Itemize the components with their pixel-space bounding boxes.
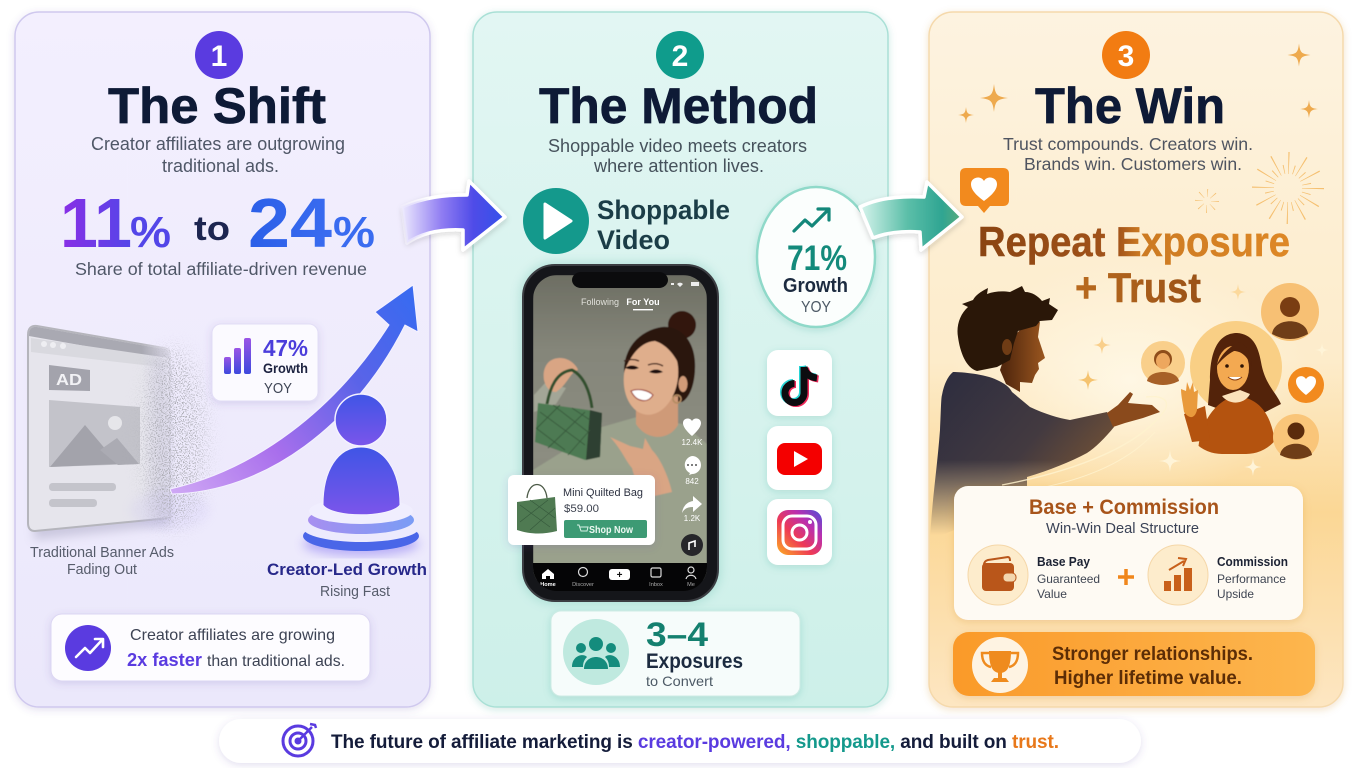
swirl of connection xyxy=(1002,397,1166,488)
top tabs: For You xyxy=(626,297,660,307)
step number 1 badge xyxy=(195,31,243,79)
growth stat card: 47% xyxy=(263,335,308,361)
label: creator-led growth xyxy=(267,560,427,600)
heading: the method: The Method xyxy=(539,78,818,134)
headline: repeat exposure + trust xyxy=(978,218,1290,311)
commission text: Commission xyxy=(1217,555,1288,569)
commission text: Performance xyxy=(1217,572,1286,586)
callout: 2x faster: than traditional ads. xyxy=(207,653,345,670)
bottom nav xyxy=(533,563,707,593)
heading: the win: The Win xyxy=(1035,78,1225,134)
exposures card: Exposures xyxy=(646,650,743,673)
step number 1 badge: 1 xyxy=(211,40,227,73)
stat: 11% to 24%: 11 xyxy=(60,184,132,262)
panel background xyxy=(473,12,888,707)
bag xyxy=(534,402,590,460)
panel: the shift xyxy=(15,12,430,707)
illustration: customer waving xyxy=(1181,321,1282,455)
eyes xyxy=(625,366,663,374)
banner: lifetime value: Stronger relationships. xyxy=(1052,644,1253,665)
growth stat card: YOY xyxy=(264,380,292,397)
stat: 11% to 24%: 24 xyxy=(248,184,332,262)
icon: heart speech bubble xyxy=(960,168,1009,213)
step number 3 badge: 3 xyxy=(1118,40,1134,73)
action icons: 842 xyxy=(685,477,699,486)
icon: commission chart xyxy=(1148,545,1208,605)
icon: trophy xyxy=(982,651,1018,682)
growth bubble: Growth xyxy=(783,275,848,297)
growth stat card: Growth xyxy=(263,360,308,376)
base pay text: Base Pay xyxy=(1037,555,1090,569)
decorative sparkles xyxy=(958,44,1318,300)
panel background xyxy=(15,12,430,707)
subtitle: where attention lives. xyxy=(593,156,764,176)
subtitle: Shoppable video meets creators xyxy=(548,136,807,156)
subtitle: Brands win. Customers win. xyxy=(1024,154,1242,174)
stat caption: Share of total affiliate-driven revenue xyxy=(75,259,367,279)
base pay text xyxy=(1037,555,1100,601)
growth bubble: 71% xyxy=(787,239,847,278)
subtitle: Creator affiliates are outgrowing xyxy=(91,133,345,154)
small sparkles xyxy=(1078,336,1329,476)
plus sign xyxy=(1118,569,1134,585)
callout: 2x faster: 2x faster xyxy=(127,650,202,670)
panel: the method xyxy=(473,12,888,707)
banner ad text inside: AD xyxy=(56,372,82,389)
subtitle xyxy=(91,133,345,176)
smile xyxy=(631,390,653,401)
bottom nav: Inbox xyxy=(649,582,663,588)
growth stat card xyxy=(212,324,318,401)
left wrist and hand xyxy=(534,382,566,412)
shoppable video logo: Video xyxy=(597,225,670,255)
headline: repeat exposure + trust: + Trust xyxy=(1075,264,1201,311)
arrow: rising creator growth xyxy=(170,285,418,494)
product card xyxy=(508,475,655,545)
label: banner ads xyxy=(30,545,174,578)
action icons: 1.2K xyxy=(684,514,701,523)
stat: 11% to 24%: % xyxy=(130,208,171,257)
ear xyxy=(678,376,688,392)
label: creator-led growth: Rising Fast xyxy=(320,584,390,600)
exposures card xyxy=(551,611,800,696)
step number 2 badge xyxy=(656,31,704,79)
community avatars xyxy=(1141,283,1319,460)
bottom nav: Discover xyxy=(572,582,594,588)
icon: youtube xyxy=(767,426,832,490)
earring xyxy=(673,395,681,403)
callout: 2x faster: Creator affiliates are growing xyxy=(130,627,335,644)
music disc xyxy=(681,534,703,556)
step number 2 badge: 2 xyxy=(672,40,688,73)
bun and hair xyxy=(668,311,696,339)
pointing hand xyxy=(610,437,672,497)
fireworks xyxy=(1199,163,1313,213)
shoppable video logo: Shoppable xyxy=(597,195,730,225)
neck xyxy=(636,396,678,437)
exposures card: to Convert xyxy=(646,673,713,689)
shoppable video logo xyxy=(523,188,730,255)
panel background xyxy=(929,12,1343,707)
closing statement: The future of affiliate marketing is creator-powered, shoppable, and built on trust. xyxy=(331,732,1059,753)
action icons: 12.4K xyxy=(682,438,703,447)
panel: the win xyxy=(929,12,1343,707)
creator figure on podium xyxy=(303,394,419,556)
icon: tiktok xyxy=(767,350,832,416)
heading: the shift: The Shift xyxy=(108,78,326,134)
bottom nav: Home xyxy=(540,582,556,588)
product card: Shop Now xyxy=(589,525,633,536)
product card: Mini Quilted Bag xyxy=(563,487,643,499)
deal card: base + commission: Win-Win Deal Structure xyxy=(1046,521,1199,537)
icon: heart circle xyxy=(1288,367,1324,403)
subtitle: traditional ads. xyxy=(162,155,279,176)
label: banner ads: Fading Out xyxy=(67,562,137,578)
sweater xyxy=(533,417,707,580)
label: creator-led growth: Creator-Led Growth xyxy=(267,560,427,579)
banner: lifetime value xyxy=(953,632,1315,696)
face xyxy=(623,340,680,415)
footer banner xyxy=(219,719,1141,763)
warm glow xyxy=(950,260,1310,500)
growth bubble: YOY xyxy=(801,299,831,316)
base pay text: Value xyxy=(1037,587,1067,601)
banner: lifetime value: Higher lifetime value. xyxy=(1054,668,1242,689)
top tabs: Following xyxy=(581,297,619,307)
arrow: method to win xyxy=(860,182,962,250)
icon: instagram xyxy=(767,499,832,565)
commission text xyxy=(1217,555,1288,601)
lavender dust glow xyxy=(130,490,210,530)
subtitle: Trust compounds. Creators win. xyxy=(1003,134,1253,154)
video photo xyxy=(533,275,707,580)
action icons xyxy=(682,419,703,523)
phone mockup xyxy=(520,262,721,604)
exposures card: 3–4 xyxy=(646,616,708,654)
bag handle xyxy=(547,370,592,408)
headline: repeat exposure + trust: Repeat Exposure xyxy=(978,218,1290,265)
deal card: base + commission xyxy=(954,486,1303,620)
icon: wallet xyxy=(968,545,1028,605)
callout: 2x faster xyxy=(51,614,370,681)
illustration: fading banner ad xyxy=(27,324,216,542)
growth bubble xyxy=(757,187,875,327)
bottom nav: Me xyxy=(687,582,695,588)
commission text: Upside xyxy=(1217,587,1254,601)
bottom nav: + xyxy=(617,570,623,581)
icon: target xyxy=(283,724,316,756)
top tabs xyxy=(582,298,659,310)
subtitle xyxy=(1003,134,1253,174)
step number 3 badge xyxy=(1102,31,1150,79)
stat: 11% to 24%: to xyxy=(194,210,230,248)
stat: 11% to 24%: % xyxy=(333,208,375,257)
base pay text: Guaranteed xyxy=(1037,572,1100,586)
arrow: shift to method xyxy=(402,181,505,250)
illustration: creator reaching out xyxy=(930,286,1166,540)
subtitle xyxy=(548,136,807,176)
label: banner ads: Traditional Banner Ads xyxy=(30,545,174,561)
particles dissolving xyxy=(135,342,216,534)
deal card: base + commission: Base + Commission xyxy=(1029,496,1219,519)
product card: $59.00 xyxy=(564,503,599,515)
stat: 11% to 24% xyxy=(60,184,375,262)
